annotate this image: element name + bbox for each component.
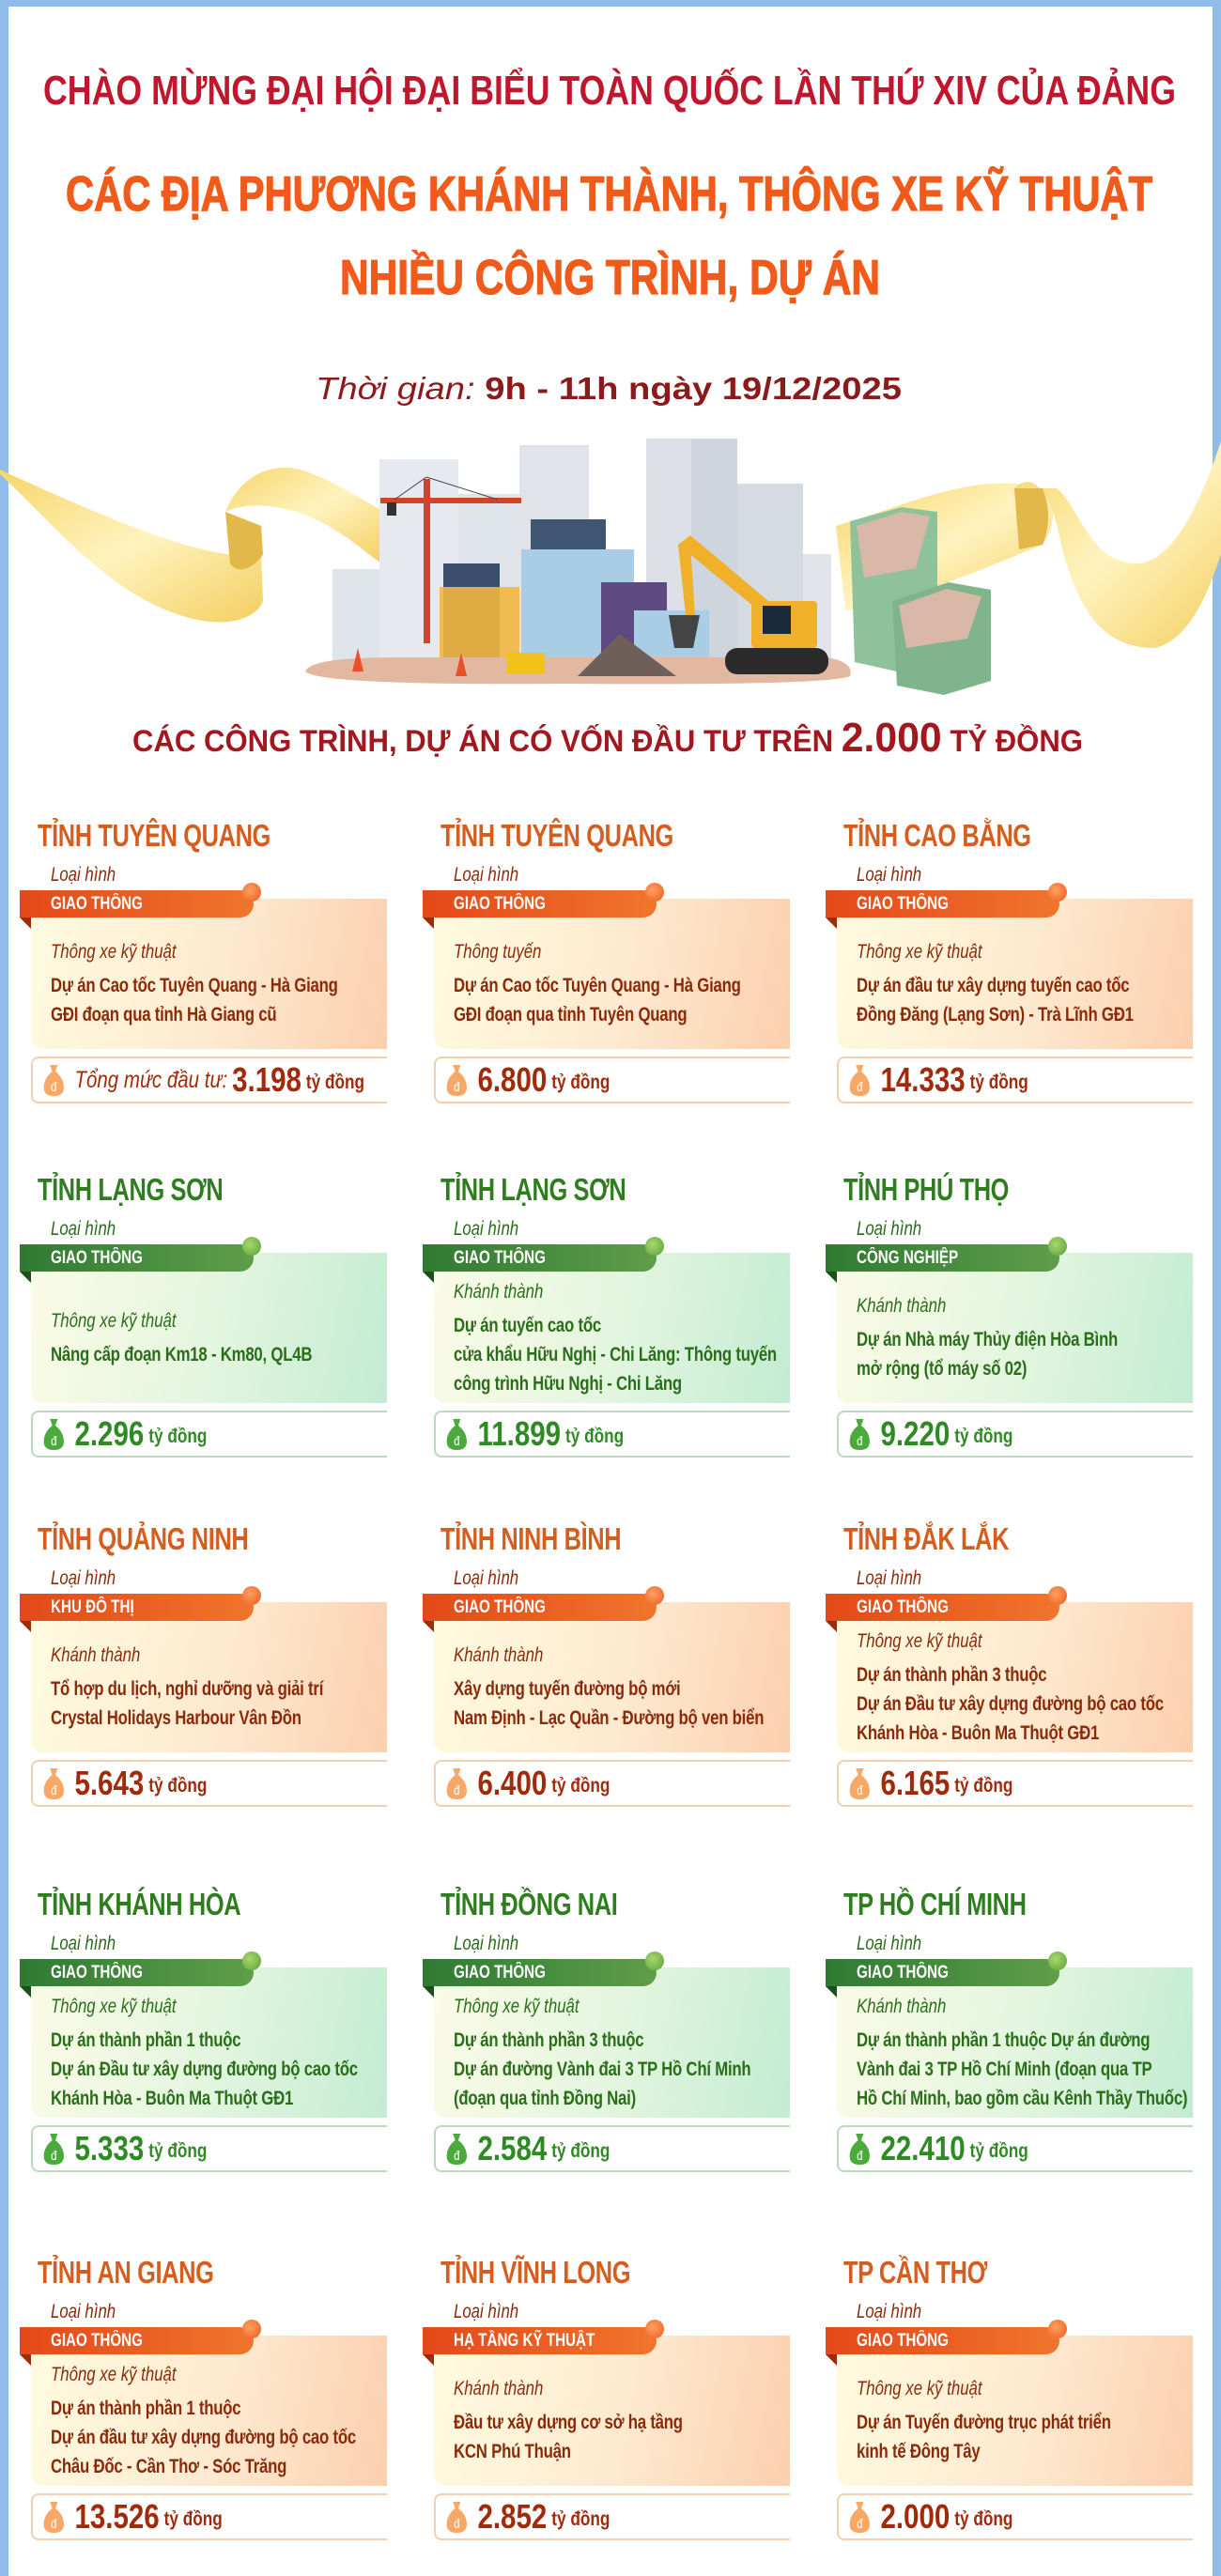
card: Cao Bằng: Dự án đầu tư xây dựng tuyến cao tốc — [857, 975, 1129, 996]
card: Tuyên Quang 2: GĐI đoạn qua tỉnh Tuyên Quang — [454, 1004, 687, 1026]
card: Ninh Bình: TỈNH NINH BÌNH — [440, 1521, 621, 1556]
ribbon right — [836, 441, 1221, 648]
card: Đắk Lắk: Thông xe kỹ thuật — [857, 1630, 982, 1651]
card: Phú Thọ — [826, 1172, 1193, 1458]
card: Phú Thọ: 9.220 — [880, 1414, 950, 1453]
card: Lạng Sơn 1: 2.296 — [74, 1414, 144, 1453]
card: Quảng Ninh: Khánh thành — [51, 1644, 140, 1666]
card: TP Hồ Chí Minh: Hồ Chí Minh, bao gồm cầu Kênh Thầy Thuốc) — [857, 2087, 1187, 2109]
card: TP Hồ Chí Minh: Khánh thành — [857, 1995, 946, 2017]
card: Lạng Sơn 2: đ — [454, 1433, 460, 1448]
card: Tuyên Quang 1: Dự án Cao tốc Tuyên Quang - Hà Giang — [51, 975, 338, 996]
card: Khánh Hòa: 5.333 — [74, 2129, 144, 2167]
card: Vĩnh Long: 2.852 — [477, 2497, 547, 2536]
card: Ninh Bình: 6.400 — [477, 1764, 547, 1802]
card: Cao Bằng: tỷ đồng — [970, 1072, 1028, 1093]
card: TP Hồ Chí Minh: Dự án thành phần 1 thuộc Dự án đường — [857, 2028, 1150, 2051]
card: Lạng Sơn 1: đ — [51, 1433, 57, 1448]
card: Tuyên Quang 2: Thông tuyến — [454, 941, 541, 963]
card: TP Hồ Chí Minh: Vành đai 3 TP Hồ Chí Minh (đoạn qua TP — [857, 2059, 1151, 2079]
card: Ninh Bình: Khánh thành — [454, 1644, 543, 1666]
card: Cần Thơ: Loại hình — [857, 2301, 921, 2322]
card: Khánh Hòa: đ — [51, 2148, 57, 2163]
subheading: CÁC CÔNG TRÌNH, DỰ ÁN CÓ VỐN ĐẦU TƯ TRÊN 2.000 TỶ ĐỒNG — [132, 715, 1083, 761]
card: Tuyên Quang 1: GĐI đoạn qua tỉnh Hà Giang cũ — [51, 1004, 276, 1026]
ground — [305, 657, 851, 684]
card: Cần Thơ: tỷ đồng — [954, 2508, 1012, 2530]
card: Khánh Hòa: Loại hình — [51, 1933, 116, 1954]
card: Đồng Nai: đ — [454, 2148, 460, 2163]
card: Tuyên Quang 2 — [423, 818, 790, 1103]
card: Vĩnh Long — [423, 2255, 790, 2540]
title line 3: NHIỀU CÔNG TRÌNH, DỰ ÁN — [340, 250, 880, 305]
card: Quảng Ninh: đ — [51, 1782, 57, 1797]
card: Đồng Nai: 2.584 — [477, 2129, 547, 2167]
card: An Giang: GIAO THÔNG — [51, 2331, 143, 2351]
card: An Giang — [20, 2255, 387, 2540]
card: An Giang: Dự án đầu tư xây dựng đường bộ cao tốc — [51, 2427, 356, 2447]
card: Khánh Hòa: Thông xe kỹ thuật — [51, 1995, 177, 2017]
card: Phú Thọ: mở rộng (tổ máy số 02) — [857, 1358, 1027, 1380]
card: Lạng Sơn 2: 11.899 — [477, 1414, 561, 1453]
card: Khánh Hòa: Dự án thành phần 1 thuộc — [51, 2028, 240, 2051]
ribbon left — [0, 468, 385, 622]
card: Ninh Bình: GIAO THÔNG — [454, 1597, 546, 1617]
time line: Thời gian: 9h - 11h ngày 19/12/2025 — [316, 371, 902, 406]
card: Vĩnh Long: tỷ đồng — [551, 2508, 610, 2530]
card: An Giang: đ — [51, 2516, 57, 2531]
card: Lạng Sơn 1: Thông xe kỹ thuật — [51, 1309, 177, 1332]
card: Vĩnh Long: HẠ TẦNG KỸ THUẬT — [454, 2331, 595, 2351]
card: Tuyên Quang 2: GIAO THÔNG — [454, 894, 546, 914]
card: Khánh Hòa: Khánh Hòa - Buôn Ma Thuột GĐ1 — [51, 2087, 293, 2109]
card: Đắk Lắk: Dự án Đầu tư xây dựng đường bộ cao tốc — [857, 1692, 1164, 1715]
card: Đắk Lắk: đ — [857, 1782, 863, 1797]
card: Quảng Ninh: tỷ đồng — [148, 1775, 207, 1797]
card: Vĩnh Long: Khánh thành — [454, 2378, 543, 2399]
card: Đồng Nai: tỷ đồng — [551, 2140, 610, 2162]
card: Cần Thơ: kinh tế Đông Tây — [857, 2441, 981, 2462]
card: Khánh Hòa: Dự án Đầu tư xây dựng đường bộ cao tốc — [51, 2059, 358, 2079]
card: Đồng Nai — [423, 1887, 790, 2172]
card: Ninh Bình: Loại hình — [454, 1567, 518, 1589]
card: Phú Thọ: tỷ đồng — [954, 1426, 1012, 1447]
card: Vĩnh Long: KCN Phú Thuận — [454, 2441, 571, 2462]
card: Ninh Bình: Xây dựng tuyến đường bộ mới — [454, 1678, 680, 1700]
card: Lạng Sơn 2: Dự án tuyến cao tốc — [454, 1315, 601, 1335]
card: An Giang: TỈNH AN GIANG — [38, 2255, 213, 2290]
excavator — [669, 535, 828, 674]
card: Cần Thơ: GIAO THÔNG — [857, 2331, 949, 2351]
card: Tuyên Quang 2: tỷ đồng — [551, 1072, 610, 1093]
card: Phú Thọ: TỈNH PHÚ THỌ — [843, 1172, 1009, 1207]
card: Tuyên Quang 1: 3.198 — [232, 1060, 301, 1099]
card: Tuyên Quang 2: Loại hình — [454, 864, 518, 886]
card: Đồng Nai: (đoạn qua tỉnh Đồng Nai) — [454, 2087, 636, 2109]
sand pile — [578, 634, 676, 676]
card: Tuyên Quang 1: Thông xe kỹ thuật — [51, 941, 177, 963]
card: Vĩnh Long: đ — [454, 2516, 460, 2531]
card: Đồng Nai: Dự án thành phần 3 thuộc — [454, 2028, 643, 2051]
card: Quảng Ninh: KHU ĐÔ THỊ — [51, 1597, 134, 1617]
card: An Giang: 13.526 — [74, 2497, 160, 2536]
card: An Giang: Dự án thành phần 1 thuộc — [51, 2397, 240, 2419]
card: Tuyên Quang 1 — [20, 818, 387, 1103]
card: Quảng Ninh: 5.643 — [74, 1764, 144, 1802]
card: Khánh Hòa: tỷ đồng — [148, 2140, 207, 2162]
card: Tuyên Quang 2: Dự án Cao tốc Tuyên Quang - Hà Giang — [454, 975, 741, 996]
card: Tuyên Quang 1: tỷ đồng — [306, 1072, 364, 1093]
card: Vĩnh Long: TỈNH VĨNH LONG — [440, 2255, 630, 2290]
card: Cao Bằng — [826, 818, 1193, 1103]
card: Đắk Lắk: Loại hình — [857, 1567, 921, 1589]
card: Khánh Hòa — [20, 1887, 387, 2172]
card: Đắk Lắk: tỷ đồng — [954, 1775, 1012, 1797]
card: Ninh Bình: tỷ đồng — [551, 1775, 610, 1797]
card: Cần Thơ: TP CẦN THƠ — [843, 2255, 987, 2290]
card: Lạng Sơn 2: TỈNH LẠNG SƠN — [440, 1172, 626, 1207]
card: Cao Bằng: đ — [857, 1079, 863, 1094]
card: Đắk Lắk — [826, 1521, 1193, 1807]
card: Phú Thọ: CÔNG NGHIỆP — [857, 1248, 958, 1268]
card: Cần Thơ: Thông xe kỹ thuật — [857, 2378, 982, 2399]
card: TP Hồ Chí Minh: TP HỒ CHÍ MINH — [843, 1887, 1027, 1921]
card: Lạng Sơn 2: Khánh thành — [454, 1281, 543, 1302]
card: Quảng Ninh — [20, 1521, 387, 1807]
card: Khánh Hòa: GIAO THÔNG — [51, 1963, 143, 1982]
card: An Giang: Loại hình — [51, 2301, 116, 2322]
card: Khánh Hòa: TỈNH KHÁNH HÒA — [38, 1887, 240, 1921]
card: TP Hồ Chí Minh — [826, 1887, 1193, 2172]
card: Lạng Sơn 1 — [20, 1172, 387, 1458]
card: Vĩnh Long: Loại hình — [454, 2301, 518, 2322]
card: Đồng Nai: GIAO THÔNG — [454, 1963, 546, 1982]
card: Tuyên Quang 1: Tổng mức đầu tư: — [74, 1067, 227, 1093]
buildings — [332, 439, 831, 675]
card: Lạng Sơn 2 — [423, 1172, 790, 1458]
card: Lạng Sơn 2: tỷ đồng — [565, 1426, 624, 1447]
card: Ninh Bình — [423, 1521, 790, 1807]
card: Lạng Sơn 1: TỈNH LẠNG SƠN — [38, 1172, 223, 1207]
card: TP Hồ Chí Minh: đ — [857, 2148, 863, 2163]
card: Cao Bằng: Thông xe kỹ thuật — [857, 941, 982, 963]
crane — [380, 477, 521, 643]
card: Tuyên Quang 2: TỈNH TUYÊN QUANG — [440, 818, 673, 853]
card: TP Hồ Chí Minh: 22.410 — [880, 2129, 966, 2167]
card: Tuyên Quang 1: GIAO THÔNG — [51, 894, 143, 914]
card: TP Hồ Chí Minh: tỷ đồng — [970, 2140, 1028, 2162]
card: Tuyên Quang 1: TỈNH TUYÊN QUANG — [38, 818, 270, 853]
card: An Giang: tỷ đồng — [164, 2508, 223, 2530]
card: Cần Thơ: Dự án Tuyến đường trục phát triển — [857, 2412, 1111, 2433]
card: An Giang: Châu Đốc - Cần Thơ - Sóc Trăng — [51, 2455, 286, 2477]
card: Cần Thơ: đ — [857, 2516, 863, 2531]
card: Lạng Sơn 2: GIAO THÔNG — [454, 1248, 546, 1268]
card: Phú Thọ: Loại hình — [857, 1218, 921, 1240]
card: Phú Thọ: Dự án Nhà máy Thủy điện Hòa Bình — [857, 1329, 1118, 1350]
card: Tuyên Quang 1: Loại hình — [51, 864, 116, 886]
card: Tuyên Quang 2: đ — [454, 1079, 460, 1094]
card: Cần Thơ: 2.000 — [880, 2497, 950, 2536]
card: Cao Bằng: TỈNH CAO BẰNG — [843, 818, 1031, 853]
card: Đồng Nai: Thông xe kỹ thuật — [454, 1995, 580, 2017]
card: Đắk Lắk: 6.165 — [880, 1764, 950, 1802]
card: Cao Bằng: 14.333 — [880, 1060, 966, 1099]
card: Lạng Sơn 2: cửa khẩu Hữu Nghị - Chi Lăng: Thông tuyến — [454, 1343, 777, 1365]
card: Lạng Sơn 2: công trình Hữu Nghị - Chi Lăng — [454, 1373, 682, 1394]
card: Đồng Nai: TỈNH ĐỒNG NAI — [440, 1887, 617, 1921]
card: Đồng Nai: Loại hình — [454, 1933, 518, 1954]
card: Vĩnh Long: Đầu tư xây dựng cơ sở hạ tầng — [454, 2412, 683, 2433]
card: An Giang: Thông xe kỹ thuật — [51, 2363, 177, 2385]
card: Phú Thọ: Khánh thành — [857, 1295, 946, 1317]
card: Quảng Ninh: TỈNH QUẢNG NINH — [38, 1521, 248, 1556]
card: Đắk Lắk: Khánh Hòa - Buôn Ma Thuột GĐ1 — [857, 1722, 1099, 1743]
card: Đắk Lắk: TỈNH ĐẮK LẮK — [843, 1521, 1009, 1556]
card: TP Hồ Chí Minh: GIAO THÔNG — [857, 1963, 949, 1982]
card: Cần Thơ — [826, 2255, 1193, 2540]
card: Lạng Sơn 1: Loại hình — [51, 1218, 116, 1240]
card: Quảng Ninh: Crystal Holidays Harbour Vân Đồn — [51, 1707, 301, 1729]
card: Đắk Lắk: GIAO THÔNG — [857, 1597, 949, 1617]
card: Tuyên Quang 1: đ — [51, 1079, 57, 1094]
card: Quảng Ninh: Loại hình — [51, 1567, 116, 1589]
card: Tuyên Quang 2: 6.800 — [477, 1060, 547, 1099]
card: TP Hồ Chí Minh: Loại hình — [857, 1933, 921, 1954]
illustration: construction site with ribbon and money — [0, 439, 1221, 695]
card: Đồng Nai: Dự án đường Vành đai 3 TP Hồ Chí Minh — [454, 2059, 750, 2079]
card: Cao Bằng: Đồng Đăng (Lạng Sơn) - Trà Lĩnh GĐ1 — [857, 1004, 1134, 1026]
card: Cao Bằng: Loại hình — [857, 864, 921, 886]
card: Cao Bằng: GIAO THÔNG — [857, 894, 949, 914]
card: Ninh Bình: Nam Định - Lạc Quần - Đường bộ ven biển — [454, 1707, 764, 1729]
card: Phú Thọ: đ — [857, 1433, 863, 1448]
card: Lạng Sơn 1: GIAO THÔNG — [51, 1248, 143, 1268]
money stacks — [850, 507, 991, 695]
card: Quảng Ninh: Tổ hợp du lịch, nghỉ dưỡng và giải trí — [51, 1678, 323, 1700]
title block — [43, 66, 1176, 406]
card: Lạng Sơn 1: Nâng cấp đoạn Km18 - Km80, QL4B — [51, 1343, 312, 1365]
card: Ninh Bình: đ — [454, 1782, 460, 1797]
card: Lạng Sơn 1: tỷ đồng — [148, 1426, 207, 1447]
card: Lạng Sơn 2: Loại hình — [454, 1218, 518, 1240]
card: Đắk Lắk: Dự án thành phần 3 thuộc — [857, 1664, 1046, 1685]
cones — [352, 648, 363, 671]
